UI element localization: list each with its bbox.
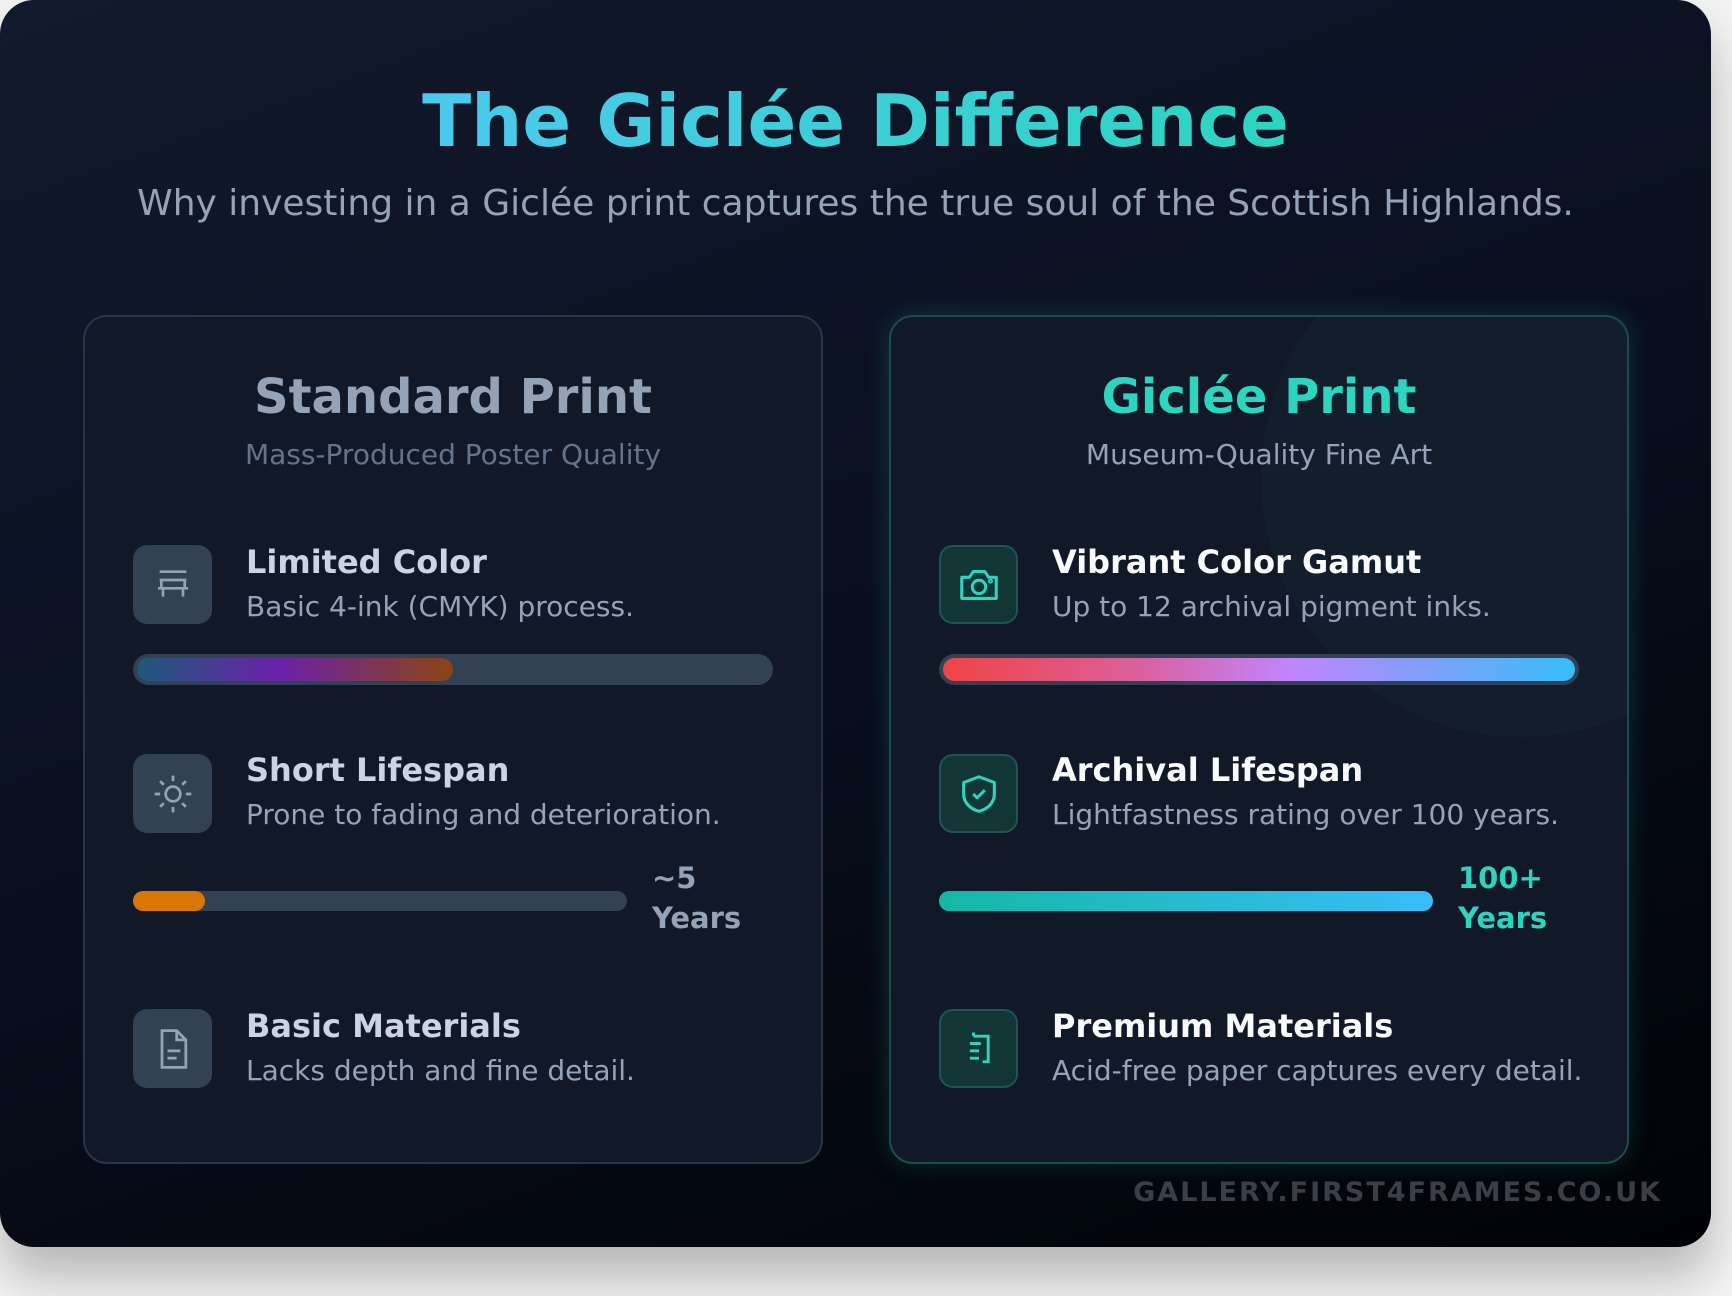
bar: full gamut	[939, 654, 1579, 685]
feature title: basic materials: Basic Materials	[246, 1007, 521, 1045]
feature desc: Up to 12 archival pigment inks.	[1052, 590, 1491, 623]
panel subtitle: standard: Mass-Produced Poster Quality	[245, 438, 661, 471]
watermark: GALLERY.FIRST4FRAMES.CO.UK	[1133, 1177, 1662, 1208]
panel: giclee print	[889, 315, 1629, 1164]
feature desc: Lacks depth and fine detail.	[246, 1054, 635, 1087]
feature desc: Basic 4-ink (CMYK) process.	[246, 590, 634, 623]
feature title: premium materials: Premium Materials	[1052, 1007, 1393, 1045]
subtitle: Why investing in a Giclée print captures the true soul of the Scottish Highlands.	[137, 183, 1574, 224]
bar: color range	[133, 654, 773, 685]
title: The Giclée Difference	[422, 79, 1289, 163]
label: ~5 years	[652, 861, 741, 935]
icon: paper	[939, 1009, 1018, 1088]
panel title: standard: Standard Print	[254, 369, 652, 425]
decorative glow circle	[1261, 217, 1732, 737]
label: 100+ years: Years	[1458, 901, 1547, 935]
feature desc: Acid-free paper captures every detail.	[1052, 1054, 1582, 1087]
feature title: vibrant color: Vibrant Color Gamut	[1052, 543, 1421, 581]
label: 100+ years	[1458, 861, 1547, 935]
icon: document	[133, 1009, 212, 1088]
panel: standard print	[83, 315, 823, 1164]
icon: sun	[133, 754, 212, 833]
feature title: short lifespan: Short Lifespan	[246, 751, 509, 789]
feature title: limited color: Limited Color	[246, 543, 487, 581]
feature desc: Lightfastness rating over 100 years.	[1052, 798, 1559, 831]
feature title: archival lifespan: Archival Lifespan	[1052, 751, 1363, 789]
panel title: giclee: Giclée Print	[1102, 369, 1416, 425]
icon: printer	[133, 545, 212, 624]
label: 100+ years: 100+	[1458, 861, 1543, 895]
panel subtitle: giclee: Museum-Quality Fine Art	[1086, 438, 1432, 471]
bar: lifespan	[133, 891, 627, 911]
label: ~5 years: Years	[652, 901, 741, 935]
feature desc: Prone to fading and deterioration.	[246, 798, 721, 831]
bar: archival	[939, 891, 1433, 911]
icon: shield	[939, 754, 1018, 833]
icon: camera	[939, 545, 1018, 624]
label: ~5 years: ~5	[652, 861, 696, 895]
